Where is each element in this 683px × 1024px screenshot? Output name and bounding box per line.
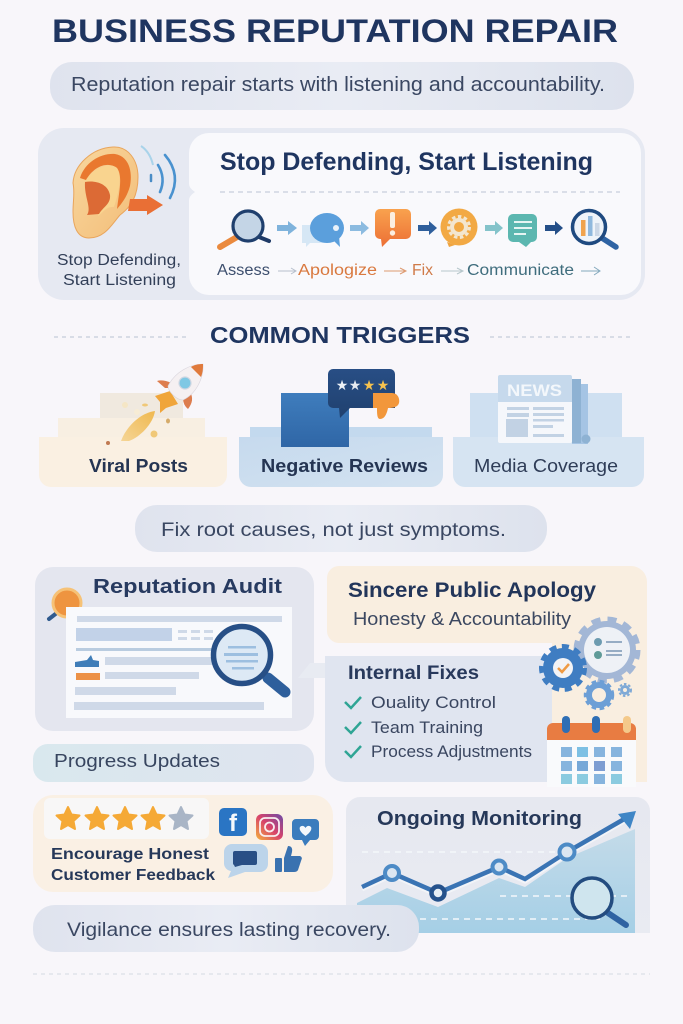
panel: customer feedback bbox=[33, 795, 333, 892]
arrow bbox=[350, 221, 369, 235]
pill: progress updates bbox=[33, 744, 314, 782]
text: encourage feedback: Customer Feedback bbox=[51, 867, 215, 884]
arrow bbox=[545, 221, 563, 235]
icon: instagram bbox=[256, 814, 283, 840]
card: viral posts bbox=[39, 364, 227, 487]
process labels: Assess bbox=[217, 262, 270, 279]
panel: ongoing monitoring bbox=[346, 797, 650, 933]
title: BUSINESS REPUTATION REPAIR bbox=[52, 13, 618, 49]
panel: internal fixes bbox=[325, 656, 552, 782]
icon: magnifier assess bbox=[220, 211, 269, 247]
icon: rocket bbox=[106, 364, 203, 445]
checklist: Team Training bbox=[371, 718, 483, 737]
process labels: Fix bbox=[412, 262, 433, 279]
icon: gears bbox=[542, 620, 638, 708]
checklist bbox=[345, 693, 532, 761]
star rating bbox=[56, 807, 192, 829]
icon: review bubble: ★ bbox=[336, 377, 348, 393]
process labels bbox=[217, 262, 600, 279]
card: negative reviews bbox=[239, 369, 443, 487]
subheading: honesty: Honesty & Accountability bbox=[353, 609, 571, 629]
text: encourage feedback bbox=[51, 846, 215, 884]
icon: orange seal bbox=[49, 589, 81, 619]
pill: vigilance bbox=[33, 905, 419, 952]
icon: newspaper bbox=[498, 375, 590, 444]
label: media coverage: Media Coverage bbox=[474, 456, 618, 476]
icon: chart magnifier bbox=[572, 878, 626, 925]
icon: magnifier results bbox=[572, 210, 616, 247]
heading: stop defending: Stop Defending, Start Listening bbox=[220, 148, 593, 176]
icon: thumbs down bbox=[373, 393, 399, 419]
tagline pill bbox=[50, 62, 634, 110]
icon: review bubble: ★ bbox=[377, 377, 389, 393]
icon: alert bubble bbox=[375, 209, 411, 247]
caption: stop defending: Stop Defending, bbox=[57, 252, 181, 269]
caption: stop defending: Start Listening bbox=[63, 272, 176, 289]
icon: ear bbox=[73, 146, 175, 238]
heading: reputation audit: Reputation Audit bbox=[93, 575, 282, 598]
icon: message bubble bbox=[508, 214, 537, 247]
process icon row bbox=[220, 208, 616, 247]
arrow bbox=[418, 221, 437, 235]
icon: speech bubbles bbox=[302, 213, 344, 247]
pill: root causes bbox=[135, 505, 547, 552]
process labels: Communicate bbox=[467, 262, 574, 279]
heading: internal fixes: Internal Fixes bbox=[348, 662, 479, 684]
heading: ongoing monitoring: Ongoing Monitoring bbox=[377, 808, 582, 830]
arrow bbox=[485, 221, 503, 235]
icon: facebook: f bbox=[229, 810, 238, 837]
icon: review bubble: ★ bbox=[363, 377, 375, 393]
label: negative reviews: Negative Reviews bbox=[261, 456, 428, 476]
line chart bbox=[357, 811, 636, 933]
icon: heart bubble bbox=[292, 819, 319, 846]
caption: stop defending bbox=[57, 252, 181, 289]
icon: calendar bbox=[547, 716, 636, 787]
audit document bbox=[66, 607, 292, 718]
checklist: Process Adjustments bbox=[371, 742, 532, 761]
pill: root causes: Fix root causes, not just symptoms. bbox=[161, 519, 506, 541]
panel: stop defending bbox=[38, 128, 645, 300]
pill: vigilance: Vigilance ensures lasting recovery. bbox=[67, 919, 391, 941]
icon: review bubble bbox=[328, 369, 399, 419]
heading: common triggers: COMMON TRIGGERS bbox=[210, 322, 470, 348]
text: encourage feedback: Encourage Honest bbox=[51, 846, 210, 863]
icon: newspaper: NEWS bbox=[507, 381, 562, 400]
arrow bbox=[277, 221, 297, 235]
card: media coverage bbox=[453, 375, 644, 487]
panel: reputation audit bbox=[35, 567, 325, 731]
heading: sincere apology: Sincere Public Apology bbox=[348, 579, 596, 602]
icon: chat bubble bbox=[224, 844, 268, 878]
icon: large magnifier bbox=[214, 626, 285, 692]
pill: progress updates: Progress Updates bbox=[54, 751, 220, 771]
icon: gear bubble bbox=[440, 208, 478, 247]
panel: sincere public apology bbox=[327, 566, 647, 782]
icon: review bubble: ★ bbox=[349, 377, 361, 393]
checklist: Ouality Control bbox=[371, 693, 496, 712]
process labels: Apologize bbox=[298, 262, 377, 279]
label: viral posts: Viral Posts bbox=[89, 456, 188, 476]
icon: thumbs up bbox=[275, 846, 302, 872]
icon: facebook bbox=[219, 808, 247, 837]
tagline pill: Reputation repair starts with listening and accountability. bbox=[71, 74, 605, 96]
